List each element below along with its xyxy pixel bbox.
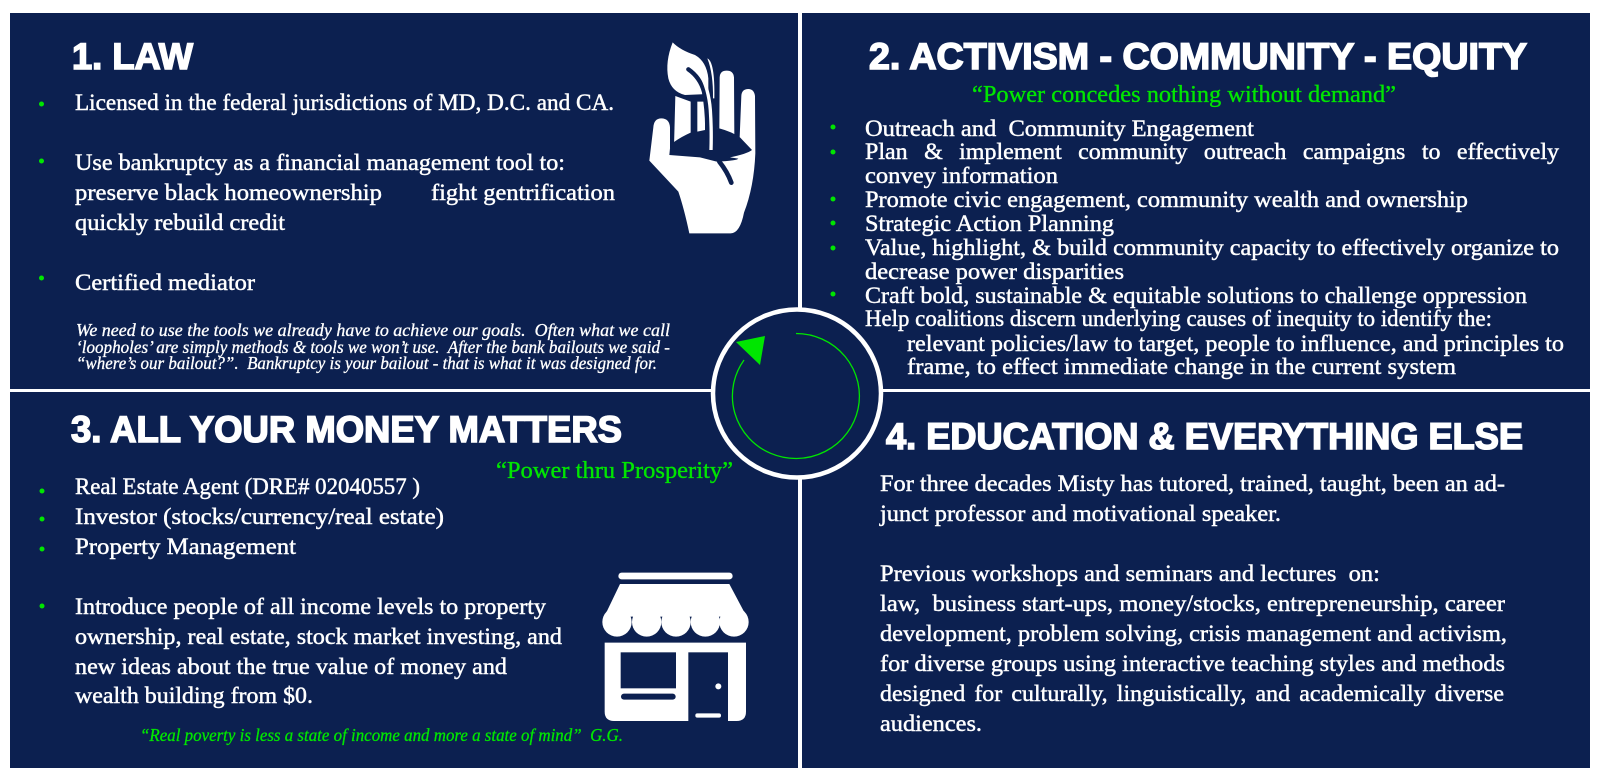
- education paragraph: junct professor and motivational speaker.: [879, 501, 1281, 526]
- activism bullet list: decrease power disparities: [865, 259, 1124, 284]
- italic note on bankruptcy: [76, 320, 670, 373]
- green quote: power thru prosperity: “Power thru Prosperity”: [496, 458, 733, 484]
- panel: all your money matters: [40, 409, 749, 745]
- workshops paragraph: designed for culturally, linguistically, and academically diverse: [880, 681, 1504, 706]
- icon: storefront: [602, 573, 749, 721]
- heading: 1. Law: 1. LAW: [72, 36, 193, 77]
- activism bullet list: Strategic Action Planning: [865, 211, 1115, 236]
- activism bullet list: Craft bold, sustainable & equitable solutions to challenge oppression: [865, 283, 1528, 308]
- law bullet list: Use bankruptcy as a financial management tool to:: [75, 150, 565, 175]
- activism bullet list: frame, to effect immediate change in the current system: [907, 354, 1456, 379]
- activism bullet list: Promote civic engagement, community wealth and ownership: [865, 187, 1468, 212]
- workshops paragraph: Previous workshops and seminars and lectures on:: [880, 561, 1380, 586]
- workshops paragraph: law, business start-ups, money/stocks, entrepreneurship, career: [880, 591, 1505, 616]
- green quote: power concedes: “Power concedes nothing without demand”: [972, 82, 1396, 108]
- italic note on bankruptcy: ‘loopholes’ are simply methods & tools we won’t use. After the bank bailouts we said -: [76, 337, 670, 357]
- italic note on bankruptcy: We need to use the tools we already have to achieve our goals. Often what we call: [76, 320, 670, 340]
- workshops paragraph: audiences.: [880, 711, 982, 736]
- money bullet list: wealth building from $0.: [75, 683, 313, 708]
- workshops paragraph: [880, 561, 1507, 736]
- center cycle emblem: [713, 310, 881, 478]
- green italic quote: real poverty: “Real poverty is less a state of income and more a state of mind” G.G.: [140, 725, 623, 745]
- activism bullet list: Value, highlight, & build community capacity to effectively organize to: [865, 235, 1559, 260]
- education paragraph: [879, 471, 1505, 526]
- law bullet list: fight gentrification: [431, 180, 616, 205]
- money bullet list: [40, 474, 563, 708]
- money bullet list: Real Estate Agent (DRE# 02040557 ): [75, 474, 420, 499]
- money bullet list: Property Management: [75, 534, 297, 559]
- law bullet list: Certified mediator: [75, 270, 255, 295]
- education paragraph: For three decades Misty has tutored, trained, taught, been an ad-: [880, 471, 1505, 496]
- money bullet list: new ideas about the true value of money and: [75, 654, 508, 679]
- heading: 3. All Your Money Matters: 3. ALL YOUR MONEY MATTERS: [71, 409, 622, 450]
- activism bullet list: Help coalitions discern underlying causes of inequity to identify the:: [865, 306, 1492, 331]
- heading: 4. Education & Everything Else: 4. EDUCATION & EVERYTHING ELSE: [886, 416, 1523, 457]
- panel: law: [39, 36, 755, 373]
- activism bullet list: Outreach and Community Engagement: [865, 116, 1255, 141]
- law bullet list: [39, 90, 616, 295]
- icon: green cycle arrow: [732, 334, 859, 458]
- workshops paragraph: for diverse groups using interactive teaching styles and methods: [880, 651, 1505, 676]
- heading: 2. Activism - Community - Equity: 2. ACTIVISM - COMMUNITY - EQUITY: [869, 36, 1527, 77]
- activism bullet list: relevant policies/law to target, people to influence, and principles to: [907, 331, 1564, 356]
- activism bullet list: Plan & implement community outreach campaigns to effectively: [865, 139, 1560, 164]
- panel: education and everything else: [879, 416, 1523, 736]
- money bullet list: ownership, real estate, stock market investing, and: [75, 624, 563, 649]
- workshops paragraph: development, problem solving, crisis management and activism,: [880, 621, 1507, 646]
- activism bullet list: convey information: [865, 163, 1059, 188]
- panel: activism community equity: [830, 36, 1564, 379]
- law bullet list: Licensed in the federal jurisdictions of MD, D.C. and CA.: [75, 90, 614, 115]
- law bullet list: preserve black homeownership: [75, 180, 382, 205]
- money bullet list: Introduce people of all income levels to property: [75, 594, 547, 619]
- icon: hand holding plant: [649, 42, 755, 233]
- law bullet list: quickly rebuild credit: [75, 210, 286, 235]
- italic note on bankruptcy: “where’s our bailout?”. Bankruptcy is your bailout - that is what it was designed for.: [76, 353, 657, 373]
- activism bullet list: [830, 116, 1564, 379]
- money bullet list: Investor (stocks/currency/real estate): [75, 504, 444, 529]
